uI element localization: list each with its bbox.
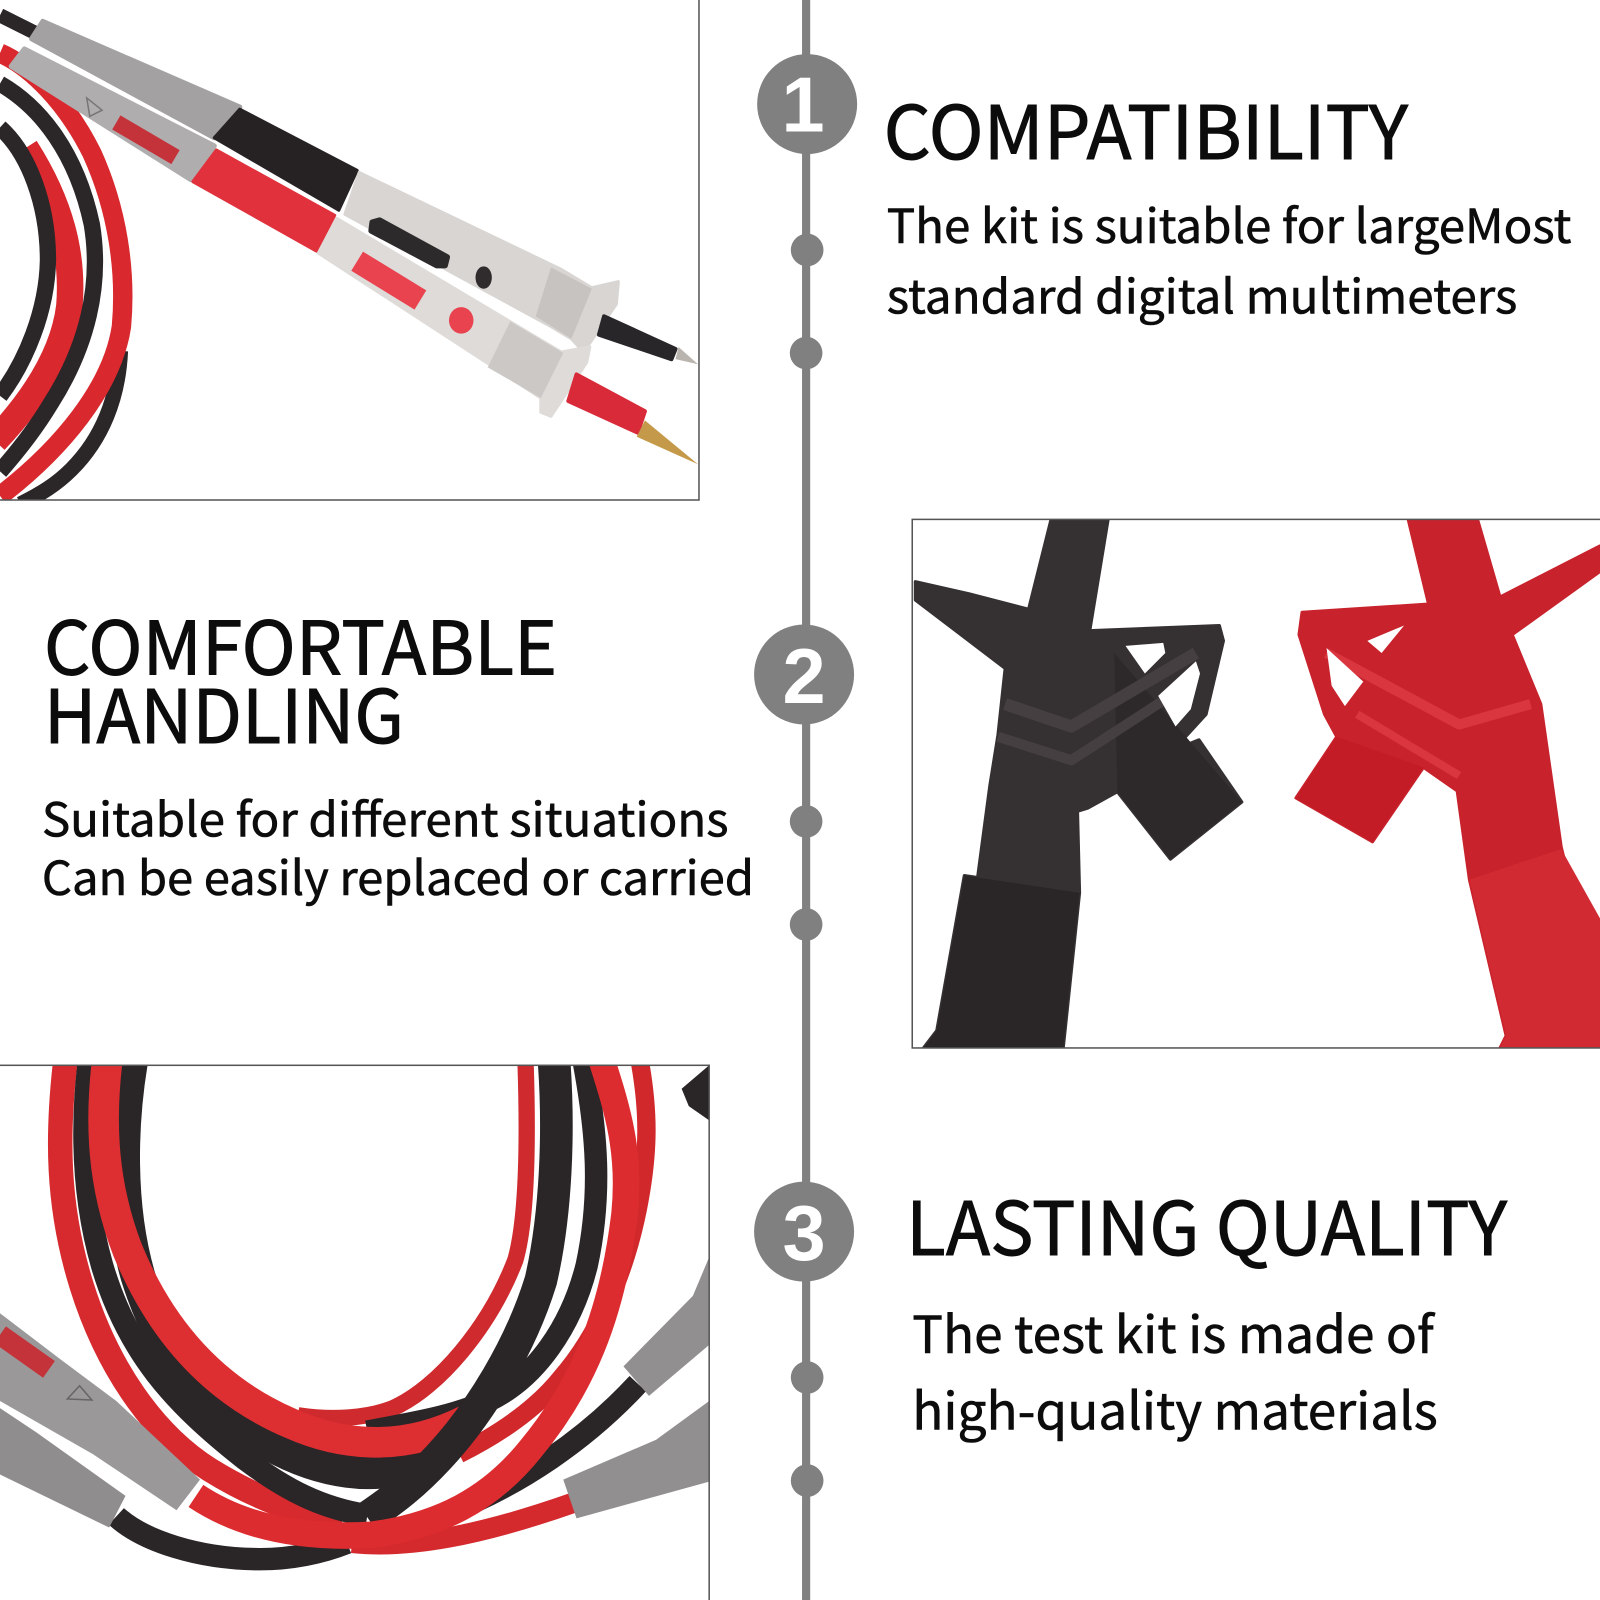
text block: comfortable handling description: Suitable for different situations	[42, 783, 729, 851]
lower probe	[11, 49, 698, 464]
number badge 3: 3	[783, 1191, 826, 1277]
text block: compatibility description: The kit is suitable for largeMost	[887, 189, 1572, 257]
number badge 2: 2	[783, 634, 826, 720]
icon: red clip	[1296, 519, 1600, 1048]
number badge 2	[754, 624, 854, 724]
text block: lasting quality description: The test kit is made of	[912, 1294, 1436, 1368]
number badge 1	[757, 54, 857, 154]
panel: probe tips photo	[0, 0, 699, 504]
text block: comfortable handling description: Can be easily replaced or carried	[42, 841, 754, 909]
number badge 1: 1	[781, 63, 825, 149]
upper probe	[32, 21, 698, 364]
icon: black clip	[915, 519, 1242, 1048]
panel: alligator clips photo	[912, 519, 1600, 1048]
heading: comfortable handling: HANDLING	[44, 659, 404, 765]
heading: compatibility: COMPATIBILITY	[884, 75, 1409, 181]
heading: comfortable handling: COMFORTABLE	[44, 590, 557, 696]
text block: compatibility description: standard digital multimeters	[887, 259, 1517, 327]
heading: lasting quality: LASTING QUALITY	[906, 1171, 1508, 1277]
grey plugs	[0, 1065, 709, 1528]
text block: lasting quality description: high-quality materials	[912, 1371, 1438, 1445]
timeline spine	[790, 0, 823, 1600]
cable bundle	[60, 1061, 646, 1559]
panel: coiled cables photo	[0, 1061, 709, 1600]
number badge 3	[754, 1182, 854, 1282]
cables	[0, 15, 123, 504]
